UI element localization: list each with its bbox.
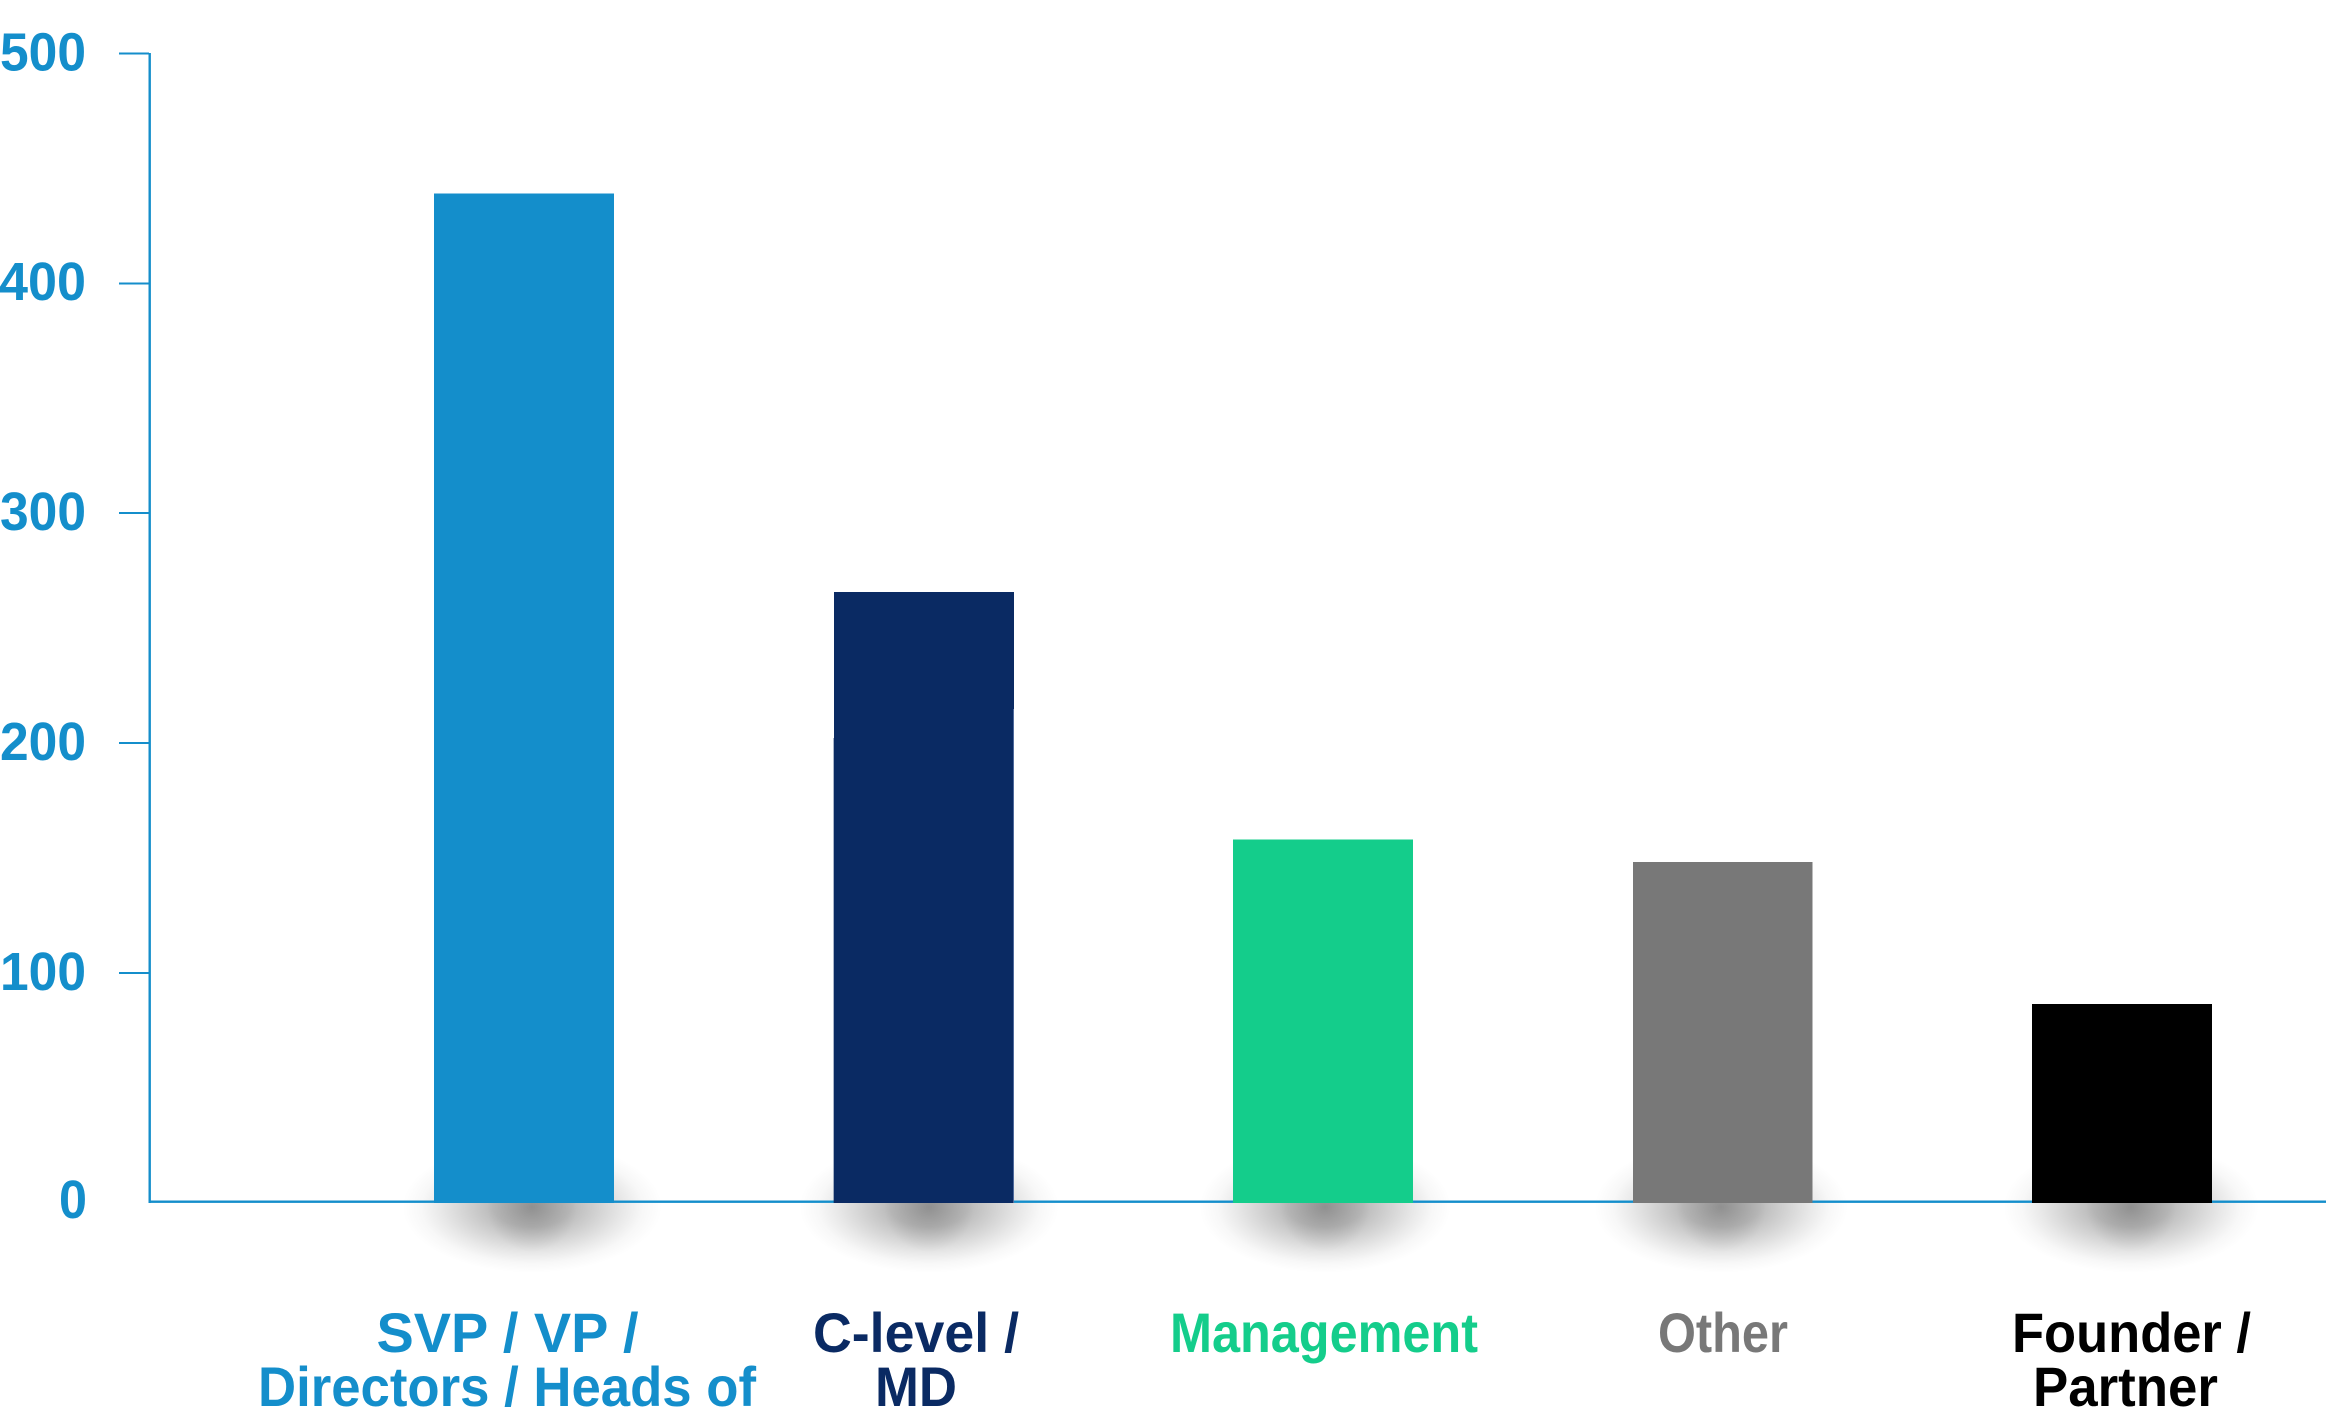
y axis labels: 300 xyxy=(0,482,86,542)
label: Founder / Partner: Founder / xyxy=(2012,1301,2251,1364)
bar: Other xyxy=(1633,862,1812,1203)
y axis labels: 0 xyxy=(59,1170,87,1230)
y axis labels: 100 xyxy=(0,942,86,1002)
y axis labels: 200 xyxy=(0,712,86,772)
y axis labels xyxy=(0,22,87,1230)
bar: C-level / MD xyxy=(833,592,1014,1203)
label: SVP / VP / Directors / Heads of: SVP / VP / xyxy=(376,1301,639,1364)
bar: Management xyxy=(1233,840,1413,1203)
bar: Founder / Partner xyxy=(2032,1004,2212,1203)
y axis with ticks xyxy=(119,52,151,1203)
y axis labels: 500 xyxy=(0,22,86,82)
label: C-level / MD: C-level / xyxy=(813,1301,1019,1364)
bar shadows xyxy=(402,1141,2259,1273)
label: Management: Management xyxy=(1170,1301,1478,1364)
x axis xyxy=(149,1200,2326,1203)
bar: SVP / VP / Directors / Heads of xyxy=(434,194,614,1203)
label: Other: Other xyxy=(1658,1301,1788,1364)
y axis labels: 400 xyxy=(0,252,86,312)
